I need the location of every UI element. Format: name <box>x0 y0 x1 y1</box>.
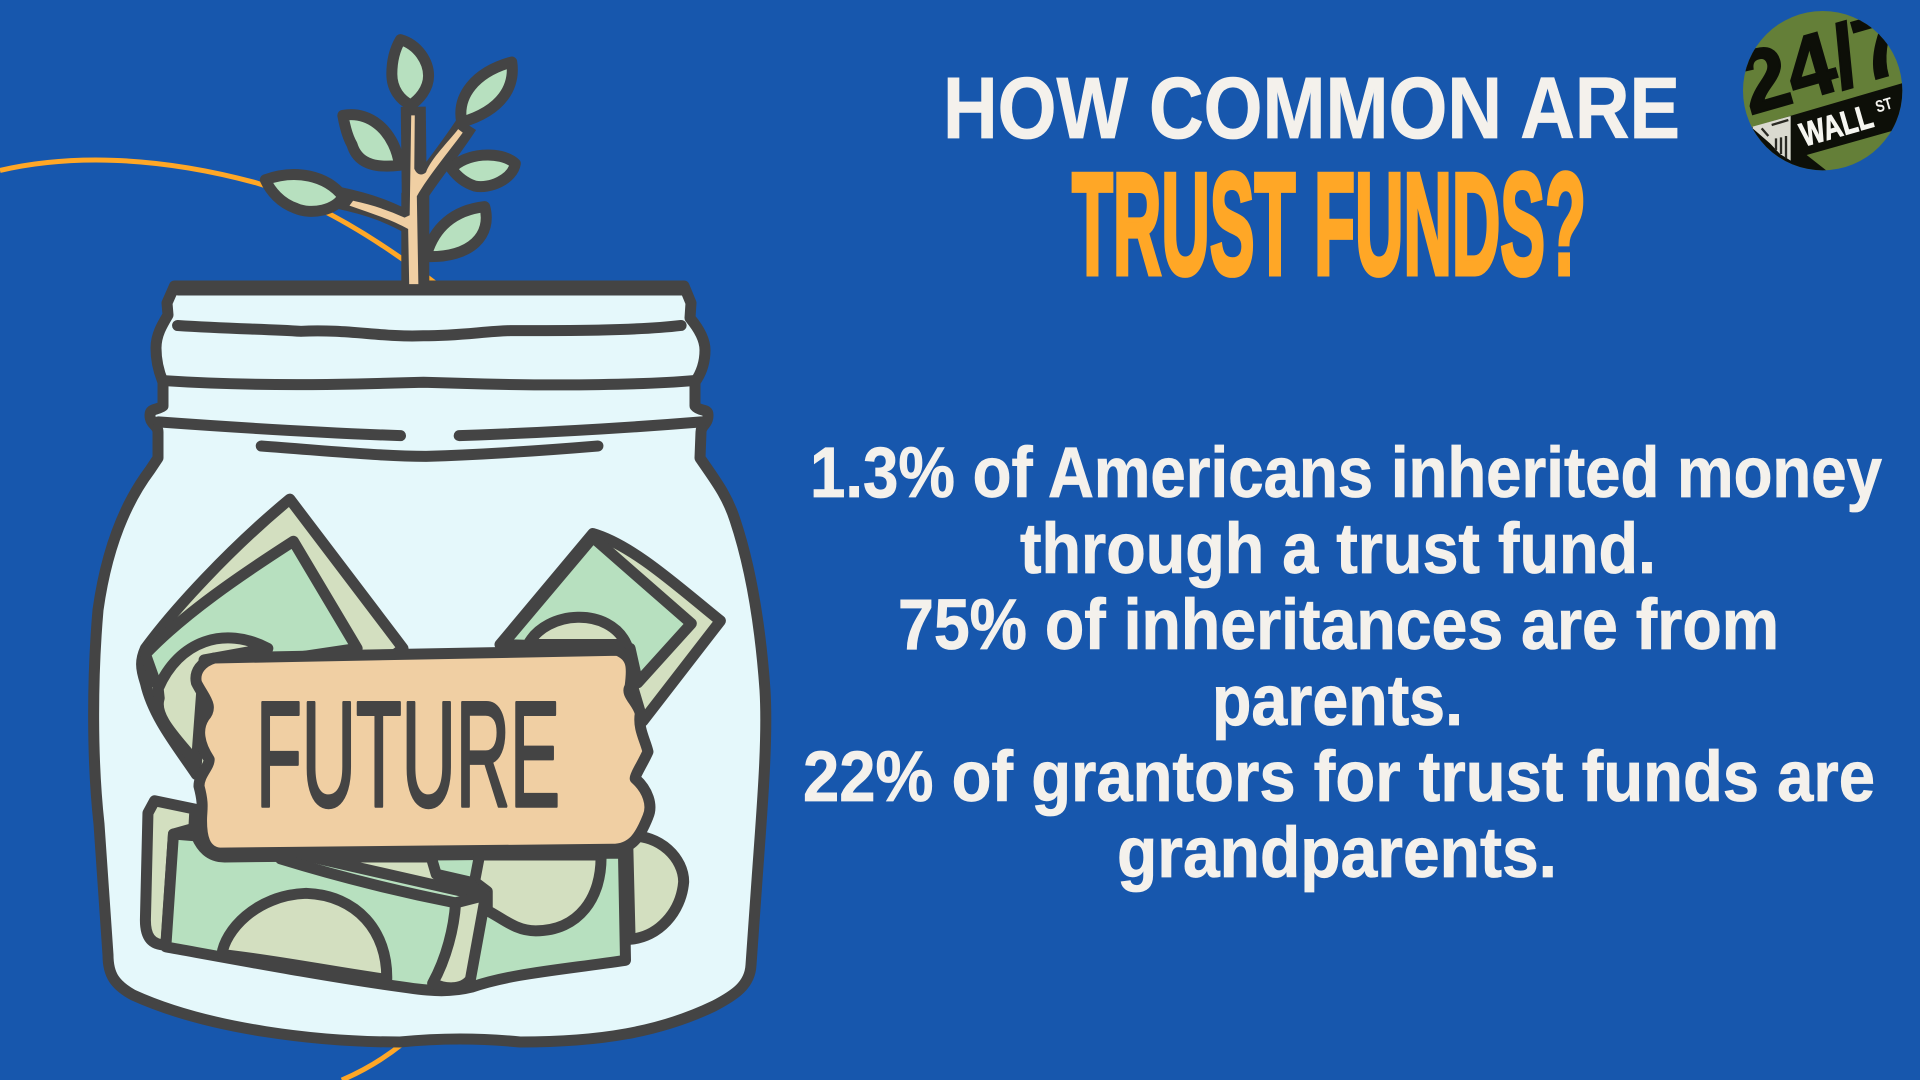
logo: 24/7 Wall St <box>1743 11 1902 170</box>
title line: how common are: HOW COMMON ARE <box>943 60 1680 157</box>
far left leaf <box>265 175 343 211</box>
dark stem and branches <box>339 107 467 284</box>
logo sign text wall: WALL <box>1796 98 1877 154</box>
orange decorative arc upper <box>0 160 439 286</box>
wavy future label <box>196 650 650 853</box>
center coin <box>474 855 601 931</box>
logo building columns <box>1762 120 1788 158</box>
right coin <box>628 836 684 939</box>
top leaf <box>392 40 429 105</box>
plant stem highlight <box>349 115 463 284</box>
upper right leaf <box>461 62 512 122</box>
back left coin <box>158 638 268 763</box>
mid right leaf <box>452 155 515 187</box>
illustration: money jar <box>94 286 766 1042</box>
logo street sign band <box>1752 83 1902 170</box>
front banknote behind face <box>166 834 626 991</box>
statistics text: grandparents. <box>1117 814 1557 893</box>
peeking banknote corner <box>311 857 480 895</box>
front left banknote edge <box>145 801 195 945</box>
illustration: plant sprout <box>265 40 515 284</box>
front banknote fold <box>433 895 486 988</box>
front banknote top line <box>281 859 456 903</box>
upper left leaf <box>343 115 399 166</box>
front coin arch <box>222 893 387 979</box>
statistics text: 75% of inheritances are from <box>898 586 1779 665</box>
back right banknote face <box>503 537 691 683</box>
jar lid and neck lines <box>158 325 702 456</box>
orange decorative arc lower <box>342 1043 403 1080</box>
back right banknote <box>500 534 720 721</box>
statistics text <box>803 434 1882 893</box>
jar rim top edge <box>178 280 682 296</box>
jar body silhouette <box>94 286 766 1042</box>
illustration: money jar: FUTURE <box>256 670 560 838</box>
lower right leaf <box>426 207 486 257</box>
back left banknote face <box>145 541 357 683</box>
cash and coins inside jar <box>142 499 720 991</box>
logo sign text st: ST <box>1873 94 1894 117</box>
back right coin <box>528 617 627 645</box>
back left banknote <box>142 499 403 775</box>
statistics text: parents. <box>1212 662 1463 741</box>
statistics text: through a trust fund. <box>1020 510 1656 589</box>
logo building photo <box>1753 116 1791 161</box>
